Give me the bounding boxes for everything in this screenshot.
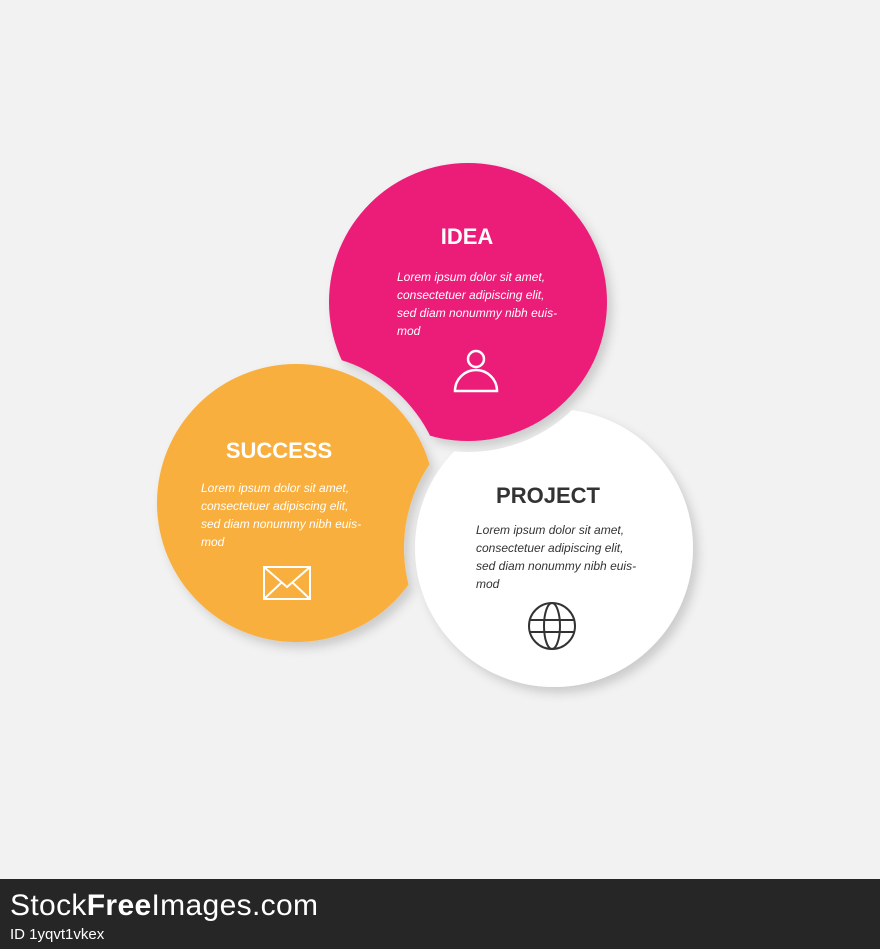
icon: person [455, 351, 497, 391]
text block: project: consectetuer adipiscing elit, [476, 541, 623, 555]
text block: success: consectetuer adipiscing elit, [201, 499, 348, 513]
heading: SUCCESS: SUCCESS [226, 438, 332, 463]
panel: project [415, 409, 693, 687]
text block: success: mod [201, 535, 225, 549]
heading: PROJECT: PROJECT [496, 483, 601, 508]
text block: success: Lorem ipsum dolor sit amet, [201, 481, 349, 495]
text block: idea: consectetuer adipiscing elit, [397, 288, 544, 302]
footer brand: StockFreeImages.com [10, 889, 318, 922]
text block: project: sed diam nonummy nibh euis- [476, 559, 636, 573]
panel: idea [329, 163, 607, 441]
text block: project: Lorem ipsum dolor sit amet, [476, 523, 624, 537]
heading: IDEA: IDEA [441, 224, 493, 249]
icon: envelope [264, 567, 310, 599]
text block: project: mod [476, 577, 500, 591]
panel: success [157, 364, 435, 642]
text block: idea: Lorem ipsum dolor sit amet, [397, 270, 545, 284]
text block: idea: sed diam nonummy nibh euis- [397, 306, 557, 320]
footer id: ID 1yqvt1vkex [10, 926, 105, 943]
text block: success: sed diam nonummy nibh euis- [201, 517, 361, 531]
text block: idea: mod [397, 324, 421, 338]
footer bar [0, 879, 880, 949]
icon: globe [529, 603, 575, 649]
